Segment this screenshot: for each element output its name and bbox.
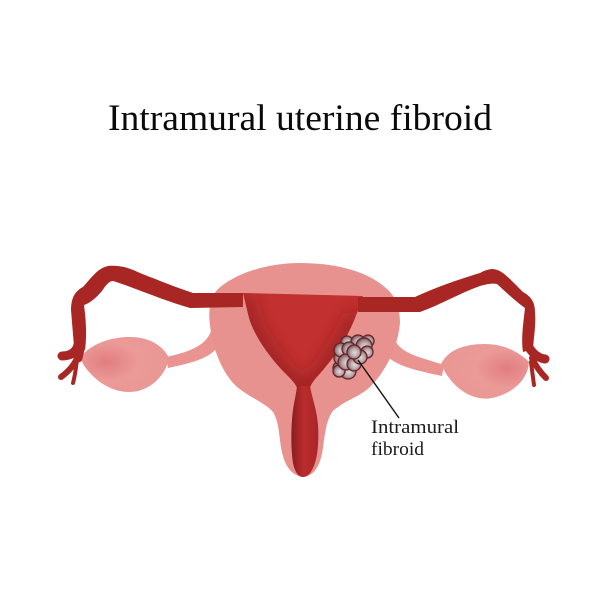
cervical canal (291, 386, 318, 477)
left ovary (80, 337, 169, 392)
right fimbriae (528, 346, 546, 385)
left fallopian tube (71, 266, 243, 350)
uterus body (209, 263, 400, 477)
right ovary (441, 344, 529, 399)
uterus illustration (61, 263, 546, 477)
fibroid label: fibroid (371, 440, 425, 460)
right fallopian tube (358, 269, 535, 352)
ovarian ligament: left (166, 328, 222, 368)
ovarian ligament: right (382, 338, 444, 376)
leader line (358, 360, 399, 418)
left fimbriae (61, 345, 81, 383)
uterine cavity (243, 293, 363, 388)
intramural fibroid (333, 335, 374, 379)
title: Intramural uterine fibroid (108, 98, 493, 139)
fibroid label: Intramural (371, 418, 459, 438)
